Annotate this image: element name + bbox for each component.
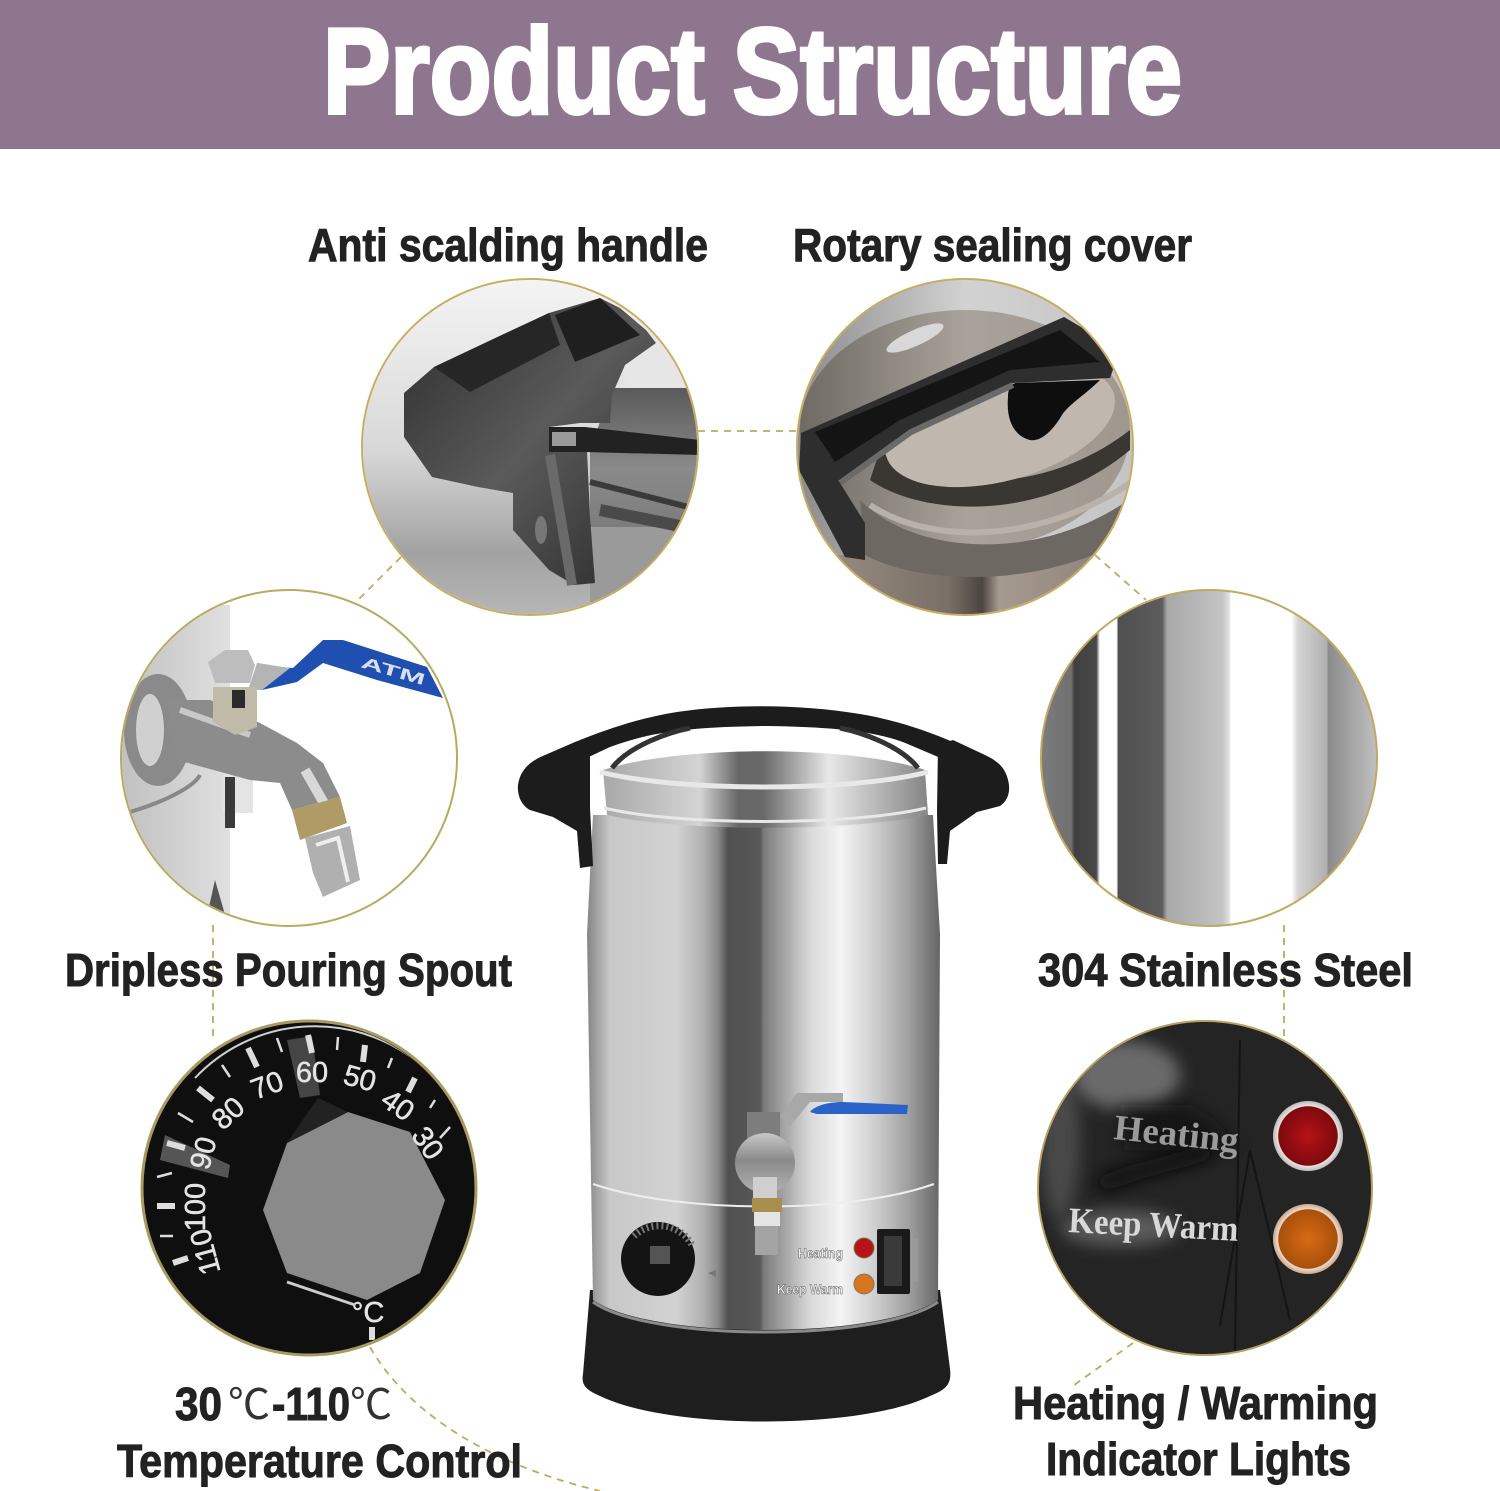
heading: 304 stainless steel: 304 Stainless Steel <box>1038 944 1413 996</box>
heading: rotary sealing cover: Rotary sealing cover <box>793 219 1192 271</box>
panel: temperature dial detail <box>142 1021 476 1355</box>
panel: spout detail <box>120 590 457 926</box>
lid <box>603 751 928 828</box>
title: Product Structure <box>323 3 1182 139</box>
heading: temperature range <box>175 1378 392 1430</box>
heading: heating warming: Heating / Warming <box>1013 1377 1378 1429</box>
panel: indicator lights detail <box>1038 1021 1372 1355</box>
heading: dripless pouring spout: Dripless Pouring Spout <box>65 944 512 996</box>
body <box>587 815 940 1330</box>
side handles <box>518 742 593 868</box>
handle brand text: ATM <box>359 655 427 689</box>
panel: indicator lights detail: Heating <box>1112 1107 1241 1160</box>
panel: temperature dial detail: 30 <box>405 1121 450 1166</box>
heading: temperature range: ℃ <box>228 1381 270 1428</box>
panel: temperature dial detail: 80 <box>206 1091 251 1136</box>
panel: temperature dial detail: 50 <box>340 1059 379 1099</box>
panel: temperature dial detail: 60 <box>296 1057 328 1089</box>
control labels: Heating <box>798 1245 843 1261</box>
panel: indicator lights detail: Keep Warm <box>1068 1200 1239 1249</box>
header band <box>0 0 1500 149</box>
panel: temperature dial detail: 100 <box>180 1183 212 1231</box>
dashed connectors <box>213 431 1284 1491</box>
heading: temperature range: 30 <box>175 1378 222 1430</box>
dial <box>621 1222 716 1296</box>
tap <box>780 1093 843 1126</box>
product: electric urn <box>518 706 1009 1422</box>
panel: temperature dial detail: 70 <box>247 1065 288 1106</box>
arched handle <box>575 706 953 762</box>
heading: temperature range: -110 <box>272 1378 350 1430</box>
panel: handle detail <box>360 279 700 620</box>
heading: temperature control: Temperature Control <box>117 1435 522 1487</box>
panel: sealing cover detail <box>795 278 1135 620</box>
product: electric urn: Keep Warm <box>777 1281 843 1297</box>
panel: temperature dial detail: °C <box>352 1297 384 1329</box>
panel: temperature dial detail: 40 <box>375 1083 420 1128</box>
panel: temperature dial detail: 110 <box>185 1225 227 1278</box>
heading: indicator lights: Indicator Lights <box>1046 1433 1351 1485</box>
panel: stainless steel detail <box>1041 590 1377 926</box>
heading: temperature range: ℃ <box>350 1381 392 1428</box>
base <box>583 1290 950 1422</box>
heading: anti scalding handle: Anti scalding handle <box>308 219 708 271</box>
panel: temperature dial detail: 90 <box>184 1134 224 1173</box>
